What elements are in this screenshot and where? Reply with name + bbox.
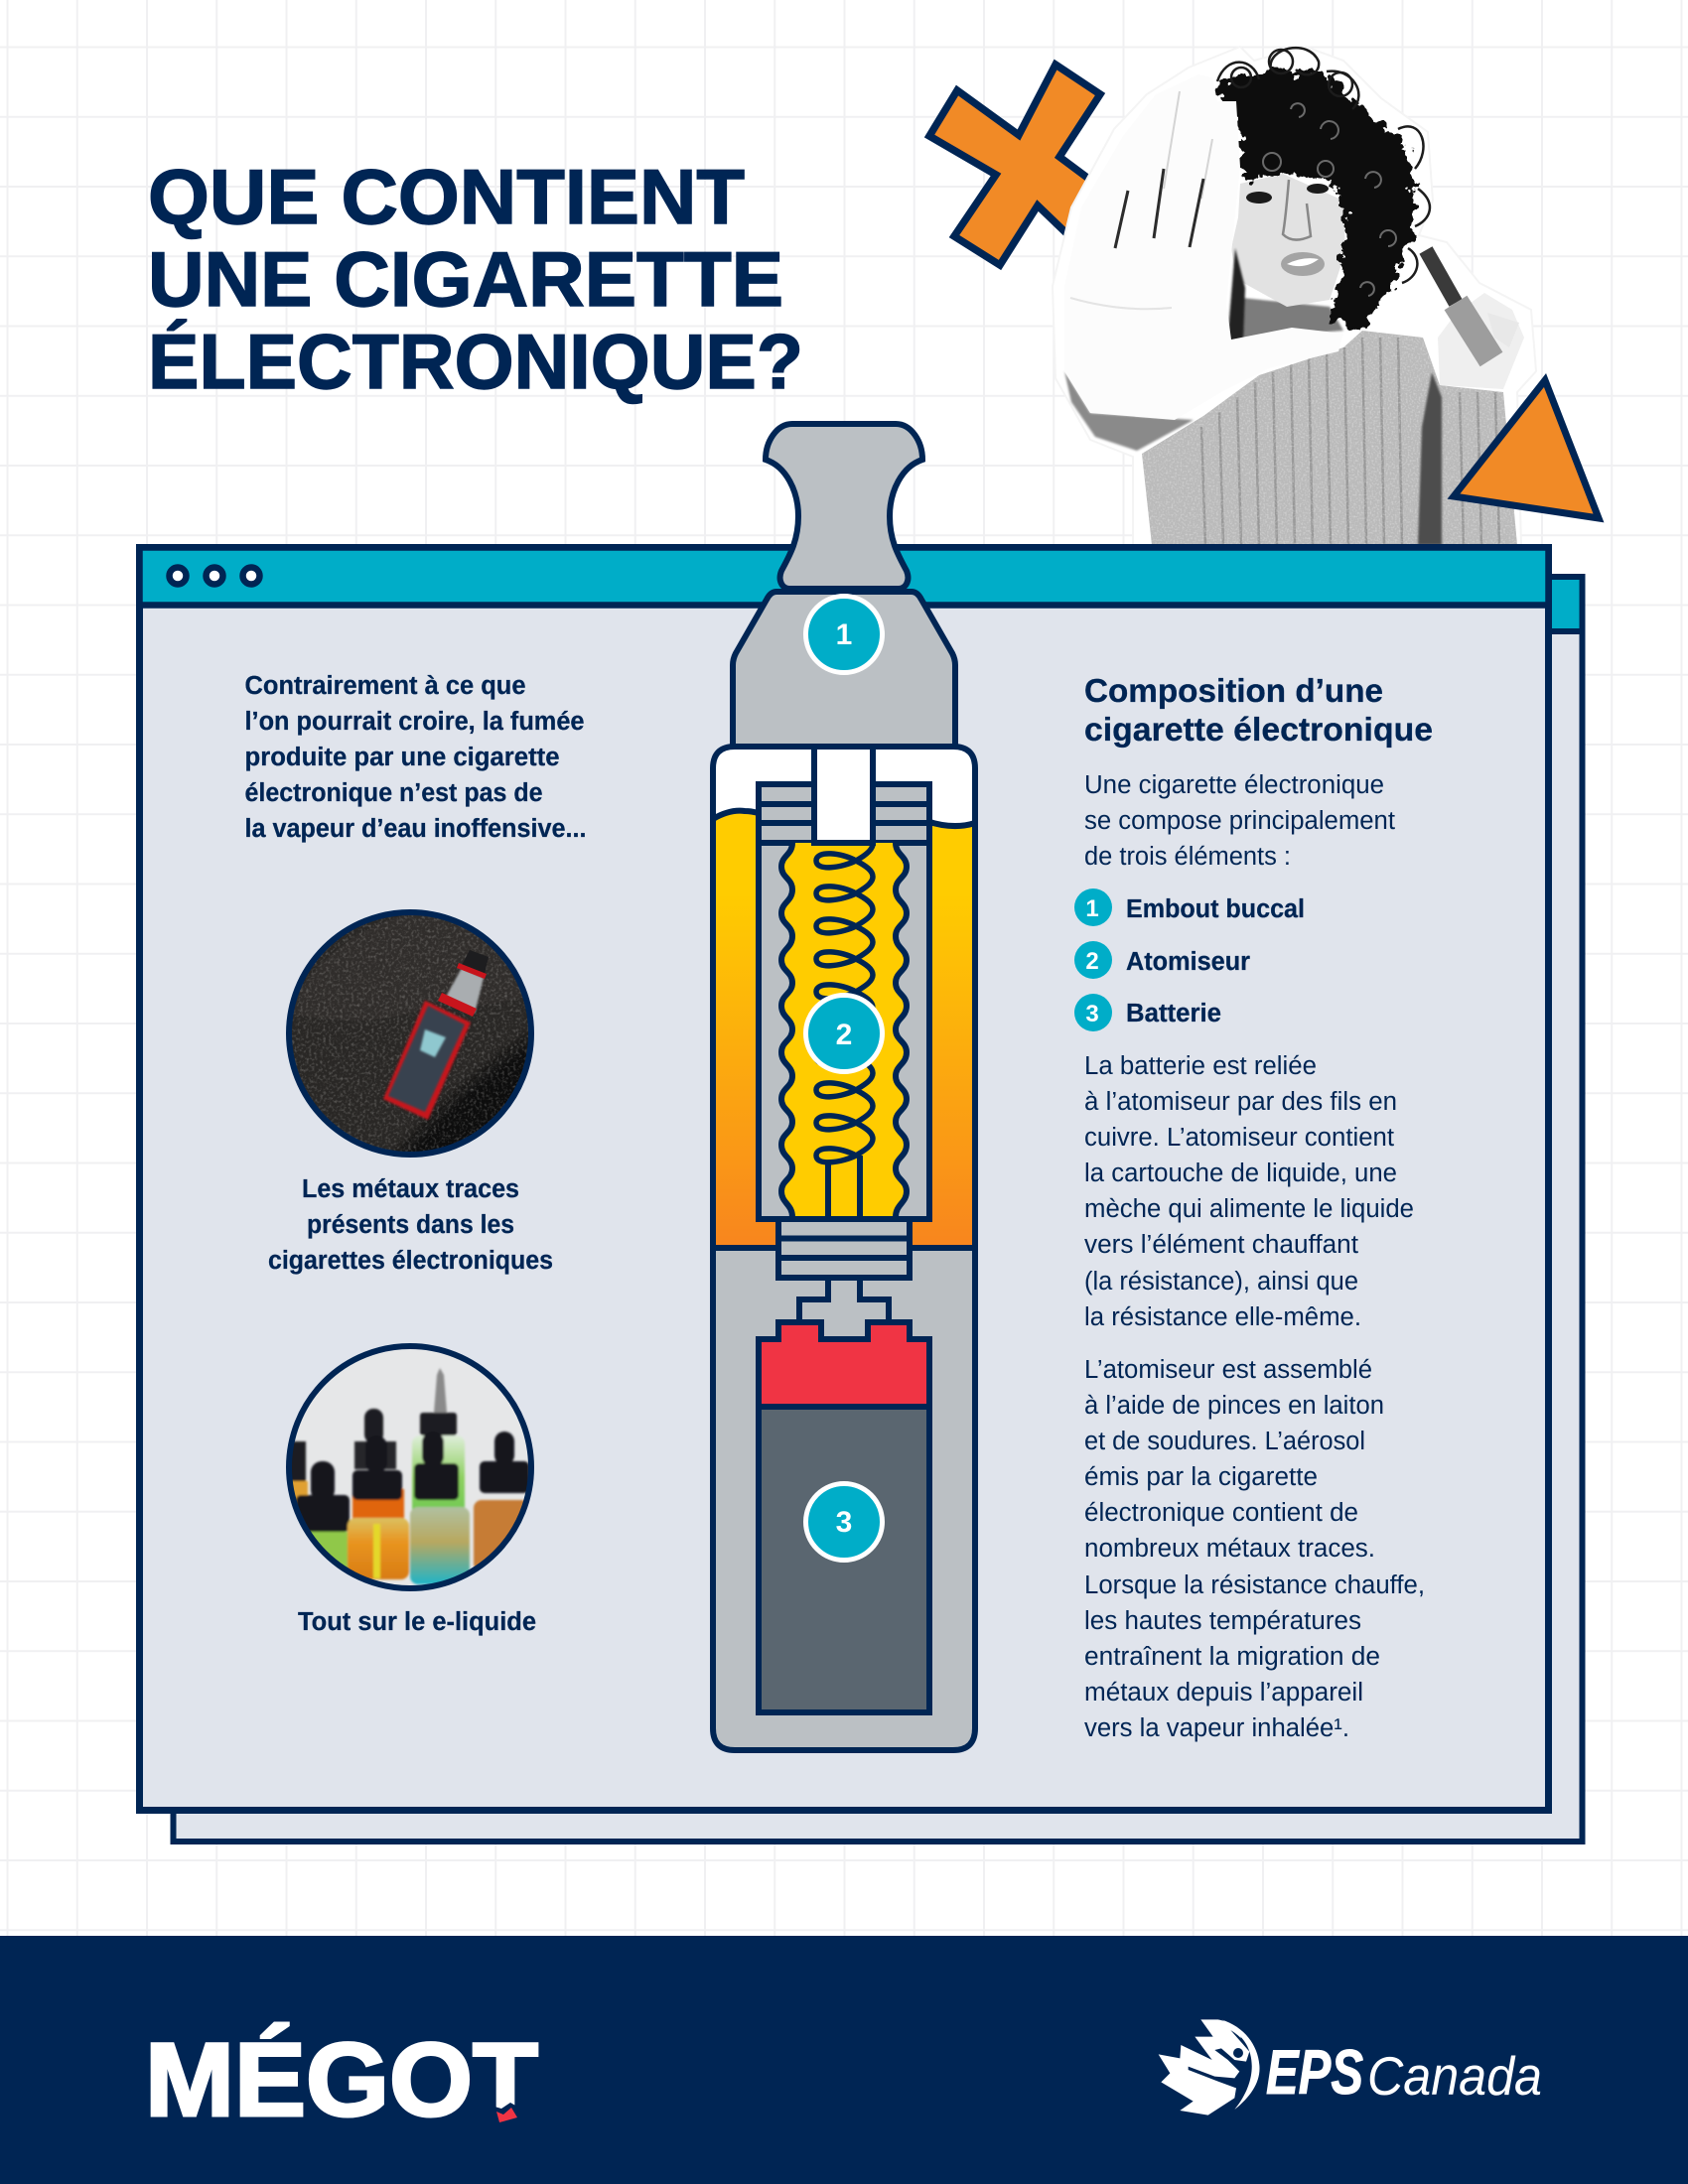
atomiser column: [759, 784, 929, 1219]
text block: introduction: [1084, 771, 1395, 871]
list of components: Atomiseur: [1126, 948, 1250, 976]
text block: metals in aerosol: Lorsque la résistance chauffe,: [1084, 1571, 1425, 1599]
logo: EPS Canada: EPS: [1266, 2038, 1363, 2108]
caption: metals: cigarettes électroniques: [268, 1247, 553, 1275]
intro text: Contrairement à ce que: [244, 672, 526, 700]
text block: battery and atomiser: cuivre. L’atomiseur contient: [1084, 1124, 1394, 1152]
figure head: [1233, 2048, 1243, 2058]
heating coil: [816, 844, 873, 1162]
logo: EPS Canada: [1159, 2019, 1542, 2116]
wick fill: [781, 843, 907, 1217]
text block: introduction: Une cigarette électronique: [1084, 771, 1384, 799]
hand: [1064, 74, 1343, 420]
intro text: électronique n’est pas de: [244, 779, 542, 807]
fingers on the vape: [1517, 322, 1519, 324]
caption: metals: Les métaux traces: [302, 1175, 519, 1203]
text block: battery and atomiser: La batterie est reliée: [1084, 1052, 1317, 1080]
marker 1: 1: [836, 618, 852, 651]
marker 1: [806, 596, 882, 673]
footer bar: [0, 1936, 1688, 2184]
hair highlights: [1263, 103, 1396, 296]
window dots: [169, 568, 260, 584]
eyes: [1246, 184, 1329, 204]
finger creases: [1070, 91, 1212, 309]
text block: battery and atomiser: [1084, 1052, 1414, 1331]
list of components: 3: [1085, 1001, 1099, 1027]
text block: battery and atomiser: (la résistance), ainsi que: [1084, 1268, 1358, 1296]
photo: woman raising a hand and holding a vape: [1053, 47, 1536, 546]
intro text: la vapeur d’eau inoffensive...: [244, 815, 586, 843]
face: [1231, 174, 1345, 307]
text block: metals in aerosol: entraînent la migration de: [1084, 1643, 1380, 1671]
sweater: [1132, 328, 1529, 546]
leaf crescent: [1221, 2019, 1260, 2110]
tank white top: [713, 747, 975, 1248]
device body: [383, 1001, 471, 1120]
second hand: [1438, 293, 1524, 389]
intro text: produite par une cigarette: [244, 744, 560, 771]
right bottle: [474, 1500, 529, 1571]
photo: e-liquid bottles: [286, 1346, 531, 1588]
marker 3: [806, 1483, 882, 1561]
list of components: 2: [1085, 948, 1099, 975]
hair: [1217, 70, 1414, 328]
orange bottle: [348, 1518, 409, 1579]
panel: front window: [139, 548, 1549, 1811]
central tube: [814, 747, 873, 843]
caption: metals: [268, 1175, 553, 1275]
title: ÉLECTRONIQUE?: [148, 318, 803, 405]
shoulder: [733, 592, 955, 750]
caption: metals: présents dans les: [307, 1211, 514, 1239]
neck: [1241, 297, 1344, 338]
title: [148, 153, 803, 405]
list of components: 1: [1085, 895, 1099, 922]
thread lines: [759, 804, 929, 843]
marker 2: 2: [836, 1019, 852, 1051]
teal bottle: [410, 1507, 470, 1584]
far left bottle: [292, 1439, 308, 1483]
marker 3: 3: [836, 1506, 852, 1539]
text block: metals in aerosol: [1084, 1356, 1425, 1742]
body outline: [713, 747, 975, 1750]
back left dropper: [354, 1441, 396, 1469]
device screen: [420, 1029, 446, 1057]
text block: battery and atomiser: vers l’élément chauffant: [1084, 1231, 1358, 1259]
title: QUE CONTIENT: [148, 153, 745, 240]
text block: introduction: se compose principalement: [1084, 807, 1395, 835]
icon: orange cross: [929, 65, 1122, 265]
text block: metals in aerosol: et de soudures. L’aérosol: [1084, 1428, 1365, 1455]
text block: metals in aerosol: électronique contient de: [1084, 1499, 1358, 1527]
device tank: [445, 968, 484, 1014]
list of components: Embout buccal: [1126, 895, 1305, 923]
text block: battery and atomiser: la résistance elle-même.: [1084, 1303, 1361, 1331]
text block: metals in aerosol: à l’aide de pinces en laiton: [1084, 1392, 1384, 1420]
connector block: [778, 1219, 910, 1278]
hair curls: [1217, 48, 1430, 283]
back green bottle: [412, 1435, 465, 1520]
wires: [828, 1156, 860, 1219]
ear shadow: [1227, 248, 1245, 342]
text block: metals in aerosol: L’atomiseur est assemblé: [1084, 1356, 1372, 1384]
lower body: [713, 1248, 975, 1750]
title: UNE CIGARETTE: [148, 235, 783, 323]
vape device: [1426, 250, 1491, 359]
intro text: l’on pourrait croire, la fumée: [244, 708, 584, 736]
sweater shadow: [1418, 372, 1442, 545]
heading: composition: cigarette électronique: [1084, 711, 1433, 748]
text block: battery and atomiser: mèche qui alimente le liquide: [1084, 1195, 1414, 1223]
photo: vape on dark rock: [286, 909, 536, 1161]
marker 2: [806, 995, 882, 1072]
text block: metals in aerosol: vers la vapeur inhalée¹.: [1084, 1714, 1349, 1742]
nose: [1283, 180, 1311, 240]
logo: MÉGOT: MÉGOT: [145, 2022, 538, 2138]
list of components: Batterie: [1126, 1000, 1221, 1027]
text block: metals in aerosol: les hautes températures: [1084, 1607, 1361, 1635]
text block: battery and atomiser: la cartouche de liquide, une: [1084, 1160, 1397, 1187]
title bar: [139, 548, 1549, 606]
intro text: [244, 672, 586, 843]
battery cap: [759, 1322, 929, 1407]
text block: metals in aerosol: nombreux métaux traces.: [1084, 1535, 1375, 1563]
maple leaf: [1159, 2019, 1249, 2116]
icon: orange triangle: [1454, 380, 1599, 518]
panel: back window: [173, 577, 1583, 1842]
sleeve: [1064, 371, 1194, 451]
text block: metals in aerosol: émis par la cigarette: [1084, 1463, 1318, 1491]
text block: battery and atomiser: à l’atomiseur par des fils en: [1084, 1088, 1397, 1116]
wick outline: [781, 843, 907, 1217]
text block: metals in aerosol: métaux depuis l’appareil: [1084, 1679, 1363, 1706]
heading: composition: Composition d’une: [1084, 672, 1383, 709]
liquid under the column: [755, 1191, 933, 1248]
lips: [1281, 252, 1325, 276]
mouthpiece: [766, 424, 922, 589]
heading: composition: [1084, 672, 1433, 748]
connector stem: [799, 1278, 889, 1322]
text block: introduction: de trois éléments :: [1084, 843, 1291, 871]
battery: [759, 1407, 929, 1712]
liquid: [713, 811, 975, 1248]
logo: EPS Canada: Canada: [1367, 2045, 1542, 2107]
diagram: e-cigarette cross-section: [713, 424, 975, 1750]
caption: e-liquid: Tout sur le e-liquide: [298, 1608, 536, 1636]
list of components: [1074, 888, 1305, 1031]
